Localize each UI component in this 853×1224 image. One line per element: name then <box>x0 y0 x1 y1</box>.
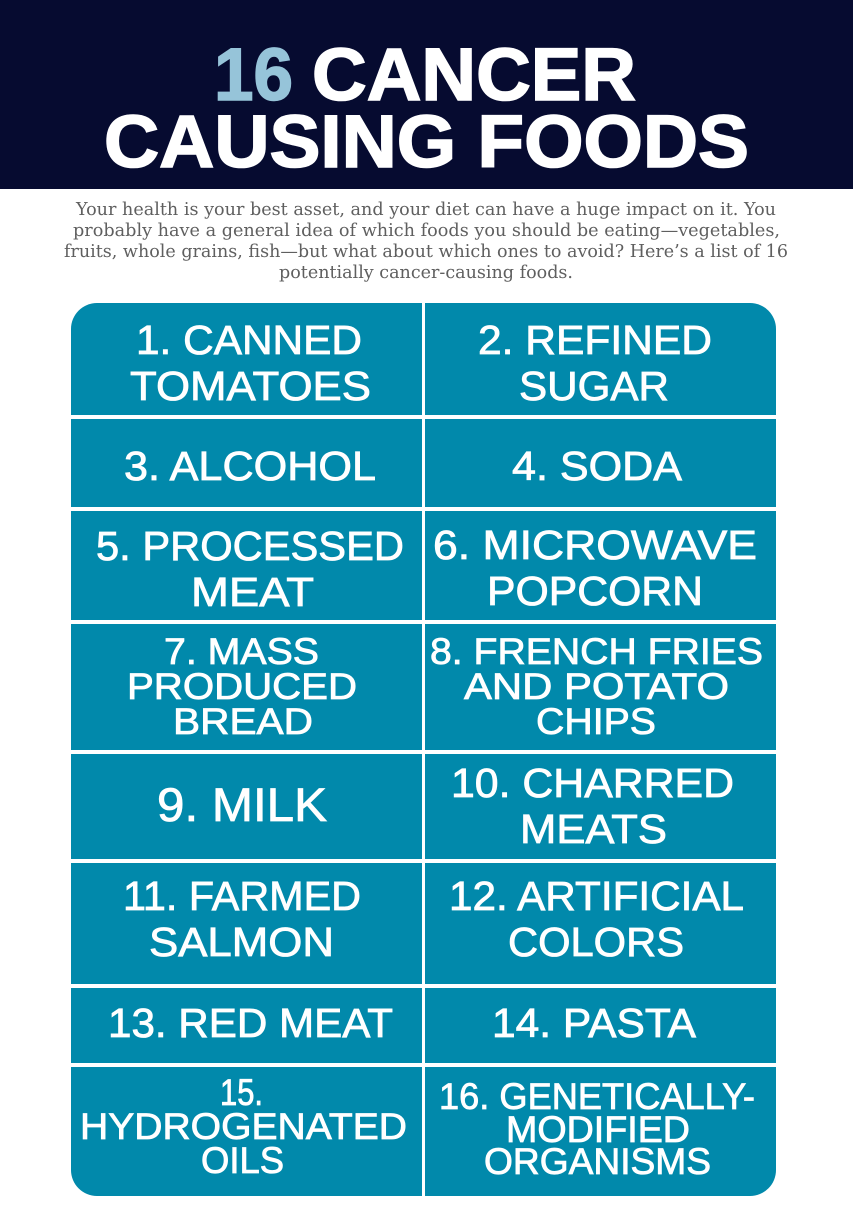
intro paragraph: probably have a general idea of which foods you should be eating—vegetables, <box>73 220 780 241</box>
item 4: 4. SODA <box>512 443 683 489</box>
item 7: PRODUCED <box>127 666 357 707</box>
intro paragraph <box>64 199 788 283</box>
item 1: TOMATOES <box>130 363 371 409</box>
item 9: 9. MILK <box>157 778 327 831</box>
item 8: 8. FRENCH FRIES <box>430 631 763 672</box>
item 1: 1. CANNED <box>136 317 362 363</box>
item 8: CHIPS <box>536 701 656 742</box>
table panel <box>71 303 776 1196</box>
item 2 <box>478 317 712 409</box>
item 8: AND POTATO <box>464 666 729 707</box>
item 14: 14. PASTA <box>492 1000 697 1046</box>
item 15: HYDROGENATED <box>80 1106 407 1147</box>
item 12: COLORS <box>508 919 684 965</box>
item 1 <box>130 317 371 409</box>
item 7: BREAD <box>173 701 313 742</box>
item 11: SALMON <box>149 919 334 965</box>
item 5: MEAT <box>191 569 314 615</box>
item 2: 2. REFINED <box>478 317 712 363</box>
item 8 <box>430 631 763 742</box>
item 11: 11. FARMED <box>123 873 361 919</box>
item 15 <box>80 1072 407 1181</box>
item 16: 16. GENETICALLY- <box>439 1076 755 1117</box>
item 10 <box>451 760 734 852</box>
item 16 <box>439 1076 755 1182</box>
title line one: CANCER <box>312 33 636 116</box>
item 15: OILS <box>201 1140 284 1181</box>
intro paragraph: Your health is your best asset, and your diet can have a huge impact on it. You <box>75 199 776 220</box>
item 12: 12. ARTIFICIAL <box>449 873 744 919</box>
intro paragraph: fruits, whole grains, fish—but what about which ones to avoid? Here’s a list of 16 <box>64 241 788 262</box>
item 13: 13. RED MEAT <box>108 1000 393 1046</box>
item 3: 3. ALCOHOL <box>124 443 376 489</box>
item 10: 10. CHARRED <box>451 760 734 806</box>
item 7: 7. MASS <box>164 631 319 672</box>
item 5: 5. PROCESSED <box>96 523 404 569</box>
item 16: MODIFIED <box>506 1109 690 1150</box>
item 11 <box>123 873 361 965</box>
item 10: MEATS <box>520 806 667 852</box>
item 6: 6. MICROWAVE <box>433 522 757 568</box>
item 7 <box>127 631 357 742</box>
header band with title: CAUSING FOODS <box>104 100 749 183</box>
item 2: SUGAR <box>519 363 669 409</box>
item 12 <box>449 873 744 965</box>
item 5 <box>96 523 404 615</box>
header band with title <box>0 0 853 189</box>
item 16: ORGANISMS <box>484 1141 711 1182</box>
item 15: 15. <box>220 1072 263 1113</box>
title line one: 16 <box>214 33 293 116</box>
item 6: POPCORN <box>487 568 703 614</box>
item 6 <box>433 522 757 614</box>
intro paragraph: potentially cancer-causing foods. <box>279 262 573 283</box>
